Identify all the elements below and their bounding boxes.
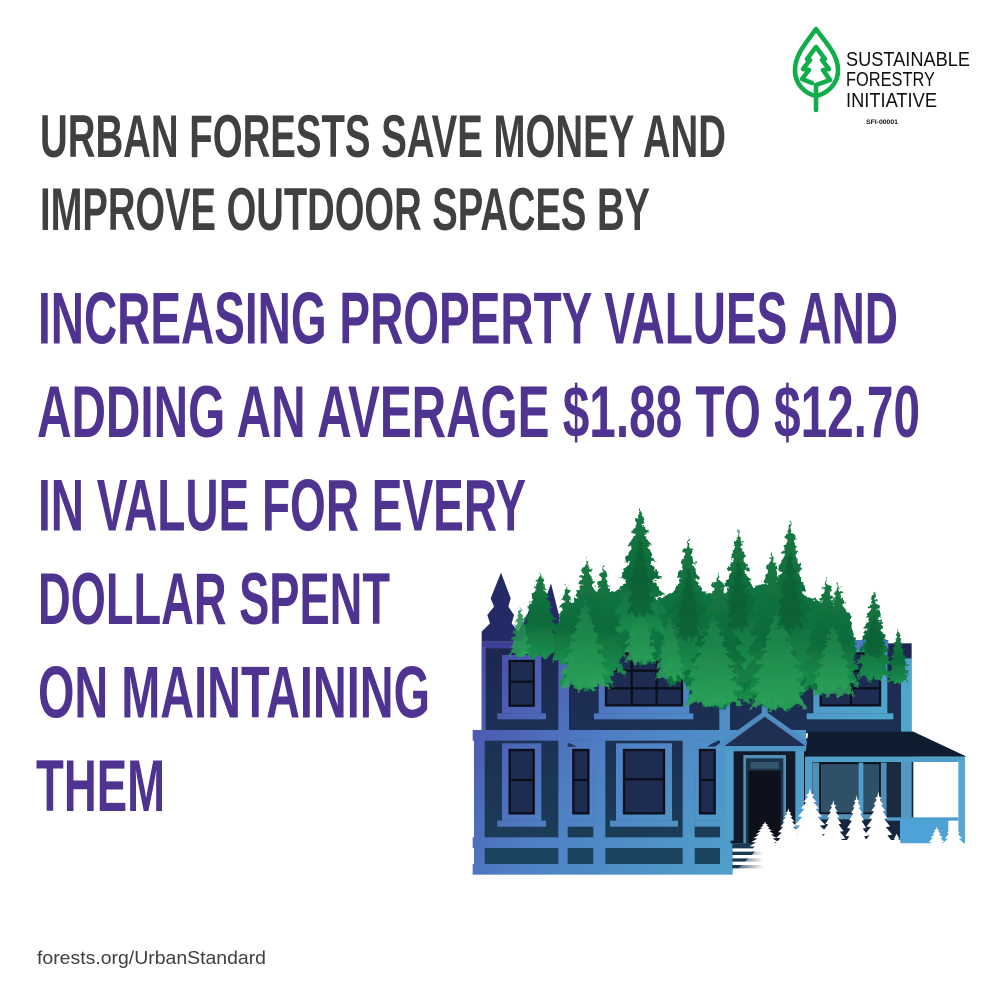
main statement <box>36 278 920 827</box>
main statement: ON MAINTAINING <box>38 652 430 734</box>
white foreground trees <box>730 788 975 877</box>
roofline and turrets <box>482 573 888 650</box>
footer url: forests.org/UrbanStandard <box>37 947 266 968</box>
icon: green leaf with tree <box>795 29 838 110</box>
logo wordmark <box>846 49 970 126</box>
porch window and posts <box>805 757 965 873</box>
porch steps <box>732 843 770 868</box>
main statement: THEM <box>36 746 165 827</box>
heading: IMPROVE OUTDOOR SPACES BY <box>40 176 650 243</box>
trees growing from the roof <box>509 507 909 712</box>
illustration: house with trees on the roof <box>473 507 975 877</box>
main statement: IN VALUE FOR EVERY <box>38 466 526 546</box>
logo wordmark: SFI-00001 <box>866 119 898 126</box>
foliage mass <box>560 583 857 710</box>
logo wordmark: SUSTAINABLE <box>846 49 970 71</box>
front door <box>743 755 786 843</box>
trim boards <box>473 623 912 875</box>
logo wordmark: FORESTRY <box>846 69 935 91</box>
house walls <box>475 643 913 867</box>
logo wordmark: INITIATIVE <box>846 90 937 112</box>
heading <box>40 103 726 243</box>
logo: Sustainable Forestry Initiative <box>795 29 970 126</box>
porch roof <box>805 732 967 757</box>
windows <box>497 650 893 827</box>
main statement: DOLLAR SPENT <box>38 559 390 640</box>
porch gable <box>715 703 815 843</box>
